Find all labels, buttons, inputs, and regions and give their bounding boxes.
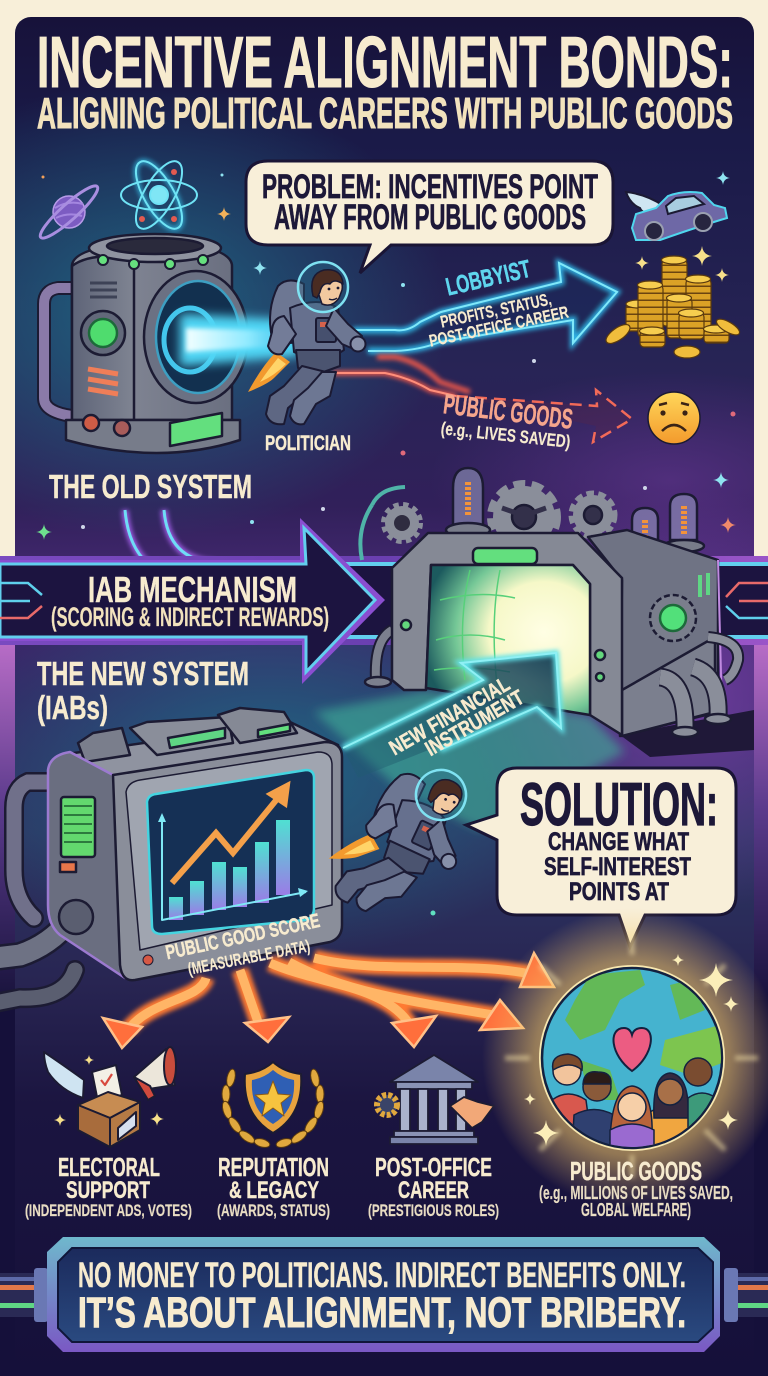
- label: new financial: NEW FINANCIAL: [386, 673, 514, 760]
- label: public goods outcome: PUBLIC GOODS: [570, 1156, 702, 1186]
- new financial instrument arrow: [343, 653, 561, 778]
- old system machine: [44, 234, 248, 453]
- side panel: [48, 752, 125, 978]
- label: electoral support: (INDEPENDENT ADS, VOTES): [25, 1201, 192, 1220]
- icon: flying car: [626, 192, 727, 240]
- heart: [614, 1028, 651, 1071]
- score label: [164, 910, 322, 979]
- mechanism text: IAB MECHANISM: [88, 569, 297, 610]
- heading: the new system: [37, 655, 249, 726]
- score label: PUBLIC GOOD SCORE: [164, 910, 322, 964]
- gears: [493, 486, 555, 548]
- solution text: SELF-INTEREST: [544, 853, 691, 881]
- machine handle pipe: [44, 288, 72, 416]
- label: electoral support: ELECTORAL: [58, 1152, 160, 1182]
- heading: the old system: THE OLD SYSTEM: [49, 468, 252, 505]
- label: post-office career: (PRESTIGIOUS ROLES): [368, 1201, 499, 1220]
- label: reputation and legacy: [217, 1152, 330, 1220]
- front panel: [113, 742, 342, 980]
- light cone and floor: [314, 690, 754, 830]
- astronaut flying: [315, 741, 490, 937]
- icon: shield with laurels: [221, 1062, 325, 1149]
- label: post-office career: [368, 1152, 499, 1220]
- dark space panel: [15, 17, 754, 1090]
- person: [548, 1054, 716, 1152]
- wing: [44, 1052, 84, 1098]
- orange reward arrows: [103, 953, 554, 1048]
- red public goods arrow: [333, 357, 632, 452]
- cables: [0, 782, 75, 1003]
- red public goods arrow: (e.g., LIVES SAVED): [440, 418, 571, 452]
- left connector traces: [0, 583, 42, 618]
- icon: ballot box with wing and megaphone: [44, 1047, 176, 1147]
- blue lobbyist arrow: POST-OFFICE CAREER: [427, 303, 570, 351]
- solution speech bubble: [466, 768, 736, 947]
- problem text: AWAY FROM PUBLIC GOODS: [274, 198, 586, 237]
- astronaut politician: [248, 262, 366, 424]
- bar chart: [158, 813, 308, 920]
- banner text: [78, 1256, 686, 1337]
- ballot paper: [92, 1065, 122, 1102]
- front arch: [392, 533, 622, 735]
- label: public goods outcome: [539, 1156, 733, 1220]
- label: reputation and legacy: (AWARDS, STATUS): [217, 1201, 330, 1220]
- label: public goods: PUBLIC GOODS: [442, 388, 575, 435]
- label: lobbyist: LOBBYIST: [443, 255, 533, 302]
- problem speech bubble: [246, 161, 613, 273]
- icon: sad face: [648, 392, 700, 444]
- big mechanism arrow: [0, 518, 385, 684]
- top face and modules: [60, 722, 338, 777]
- heading: the new system: (IABs): [37, 689, 108, 726]
- icon: institution with handshake: [377, 1055, 494, 1144]
- label: post-office career: CAREER: [398, 1177, 469, 1204]
- problem text: [262, 168, 598, 237]
- solution text: [520, 771, 718, 906]
- bottom banner: [47, 1237, 720, 1352]
- box: [78, 1092, 140, 1118]
- label: politician: POLITICIAN: [265, 432, 351, 455]
- score monitor machine: [48, 708, 342, 980]
- solution text: CHANGE WHAT: [548, 828, 689, 856]
- label: electoral support: [25, 1152, 192, 1220]
- label: post-office career: POST-OFFICE: [375, 1152, 492, 1182]
- machine base: [66, 420, 240, 453]
- curved connector lines: [125, 510, 216, 563]
- porthole: [144, 271, 248, 403]
- mechanism text: (SCORING & INDIRECT REWARDS): [51, 602, 329, 632]
- laurels: [221, 1068, 325, 1149]
- circular arrows: [360, 487, 405, 560]
- icon: atom: [121, 155, 197, 235]
- blue lobbyist arrow: [353, 255, 617, 351]
- IAB mechanism band: [0, 518, 768, 684]
- problem text: PROBLEM: INCENTIVES POINT: [262, 168, 598, 206]
- left side pipes: [376, 630, 392, 680]
- glowing globe with people: [482, 908, 768, 1208]
- beam from porthole: [180, 314, 300, 366]
- trend arrow: [172, 783, 289, 883]
- right connector traces: [726, 583, 768, 618]
- label: profits: PROFITS, STATUS,: [439, 290, 553, 332]
- portal machine: [360, 468, 738, 737]
- vacuum tubes: [446, 468, 704, 566]
- solution text: POINTS AT: [569, 878, 669, 906]
- screen: [147, 770, 314, 934]
- heading: the new system: THE NEW SYSTEM: [37, 655, 249, 692]
- right pipes: [660, 637, 738, 730]
- new financial instrument arrow: INSTRUMENT: [421, 686, 528, 761]
- land masses: [565, 970, 645, 1040]
- small gear: [385, 506, 419, 540]
- label: public goods outcome: GLOBAL WELFARE): [581, 1200, 691, 1220]
- mechanism text: [51, 569, 329, 632]
- label: reputation and legacy: & LEGACY: [229, 1177, 319, 1204]
- icon: ringed planet: [35, 181, 103, 243]
- decorative stars and dots: [36, 171, 736, 916]
- side box: [588, 530, 718, 736]
- side connectors: [0, 1268, 768, 1322]
- title: [37, 23, 733, 138]
- label: electoral support: SUPPORT: [66, 1177, 150, 1204]
- side strips: [0, 645, 768, 1376]
- megaphone: [134, 1049, 175, 1090]
- icon: coin stacks: [603, 246, 742, 358]
- score label: (MEASURABLE DATA): [186, 936, 312, 979]
- label: reputation and legacy: REPUTATION: [218, 1152, 329, 1182]
- machine body: [72, 240, 232, 420]
